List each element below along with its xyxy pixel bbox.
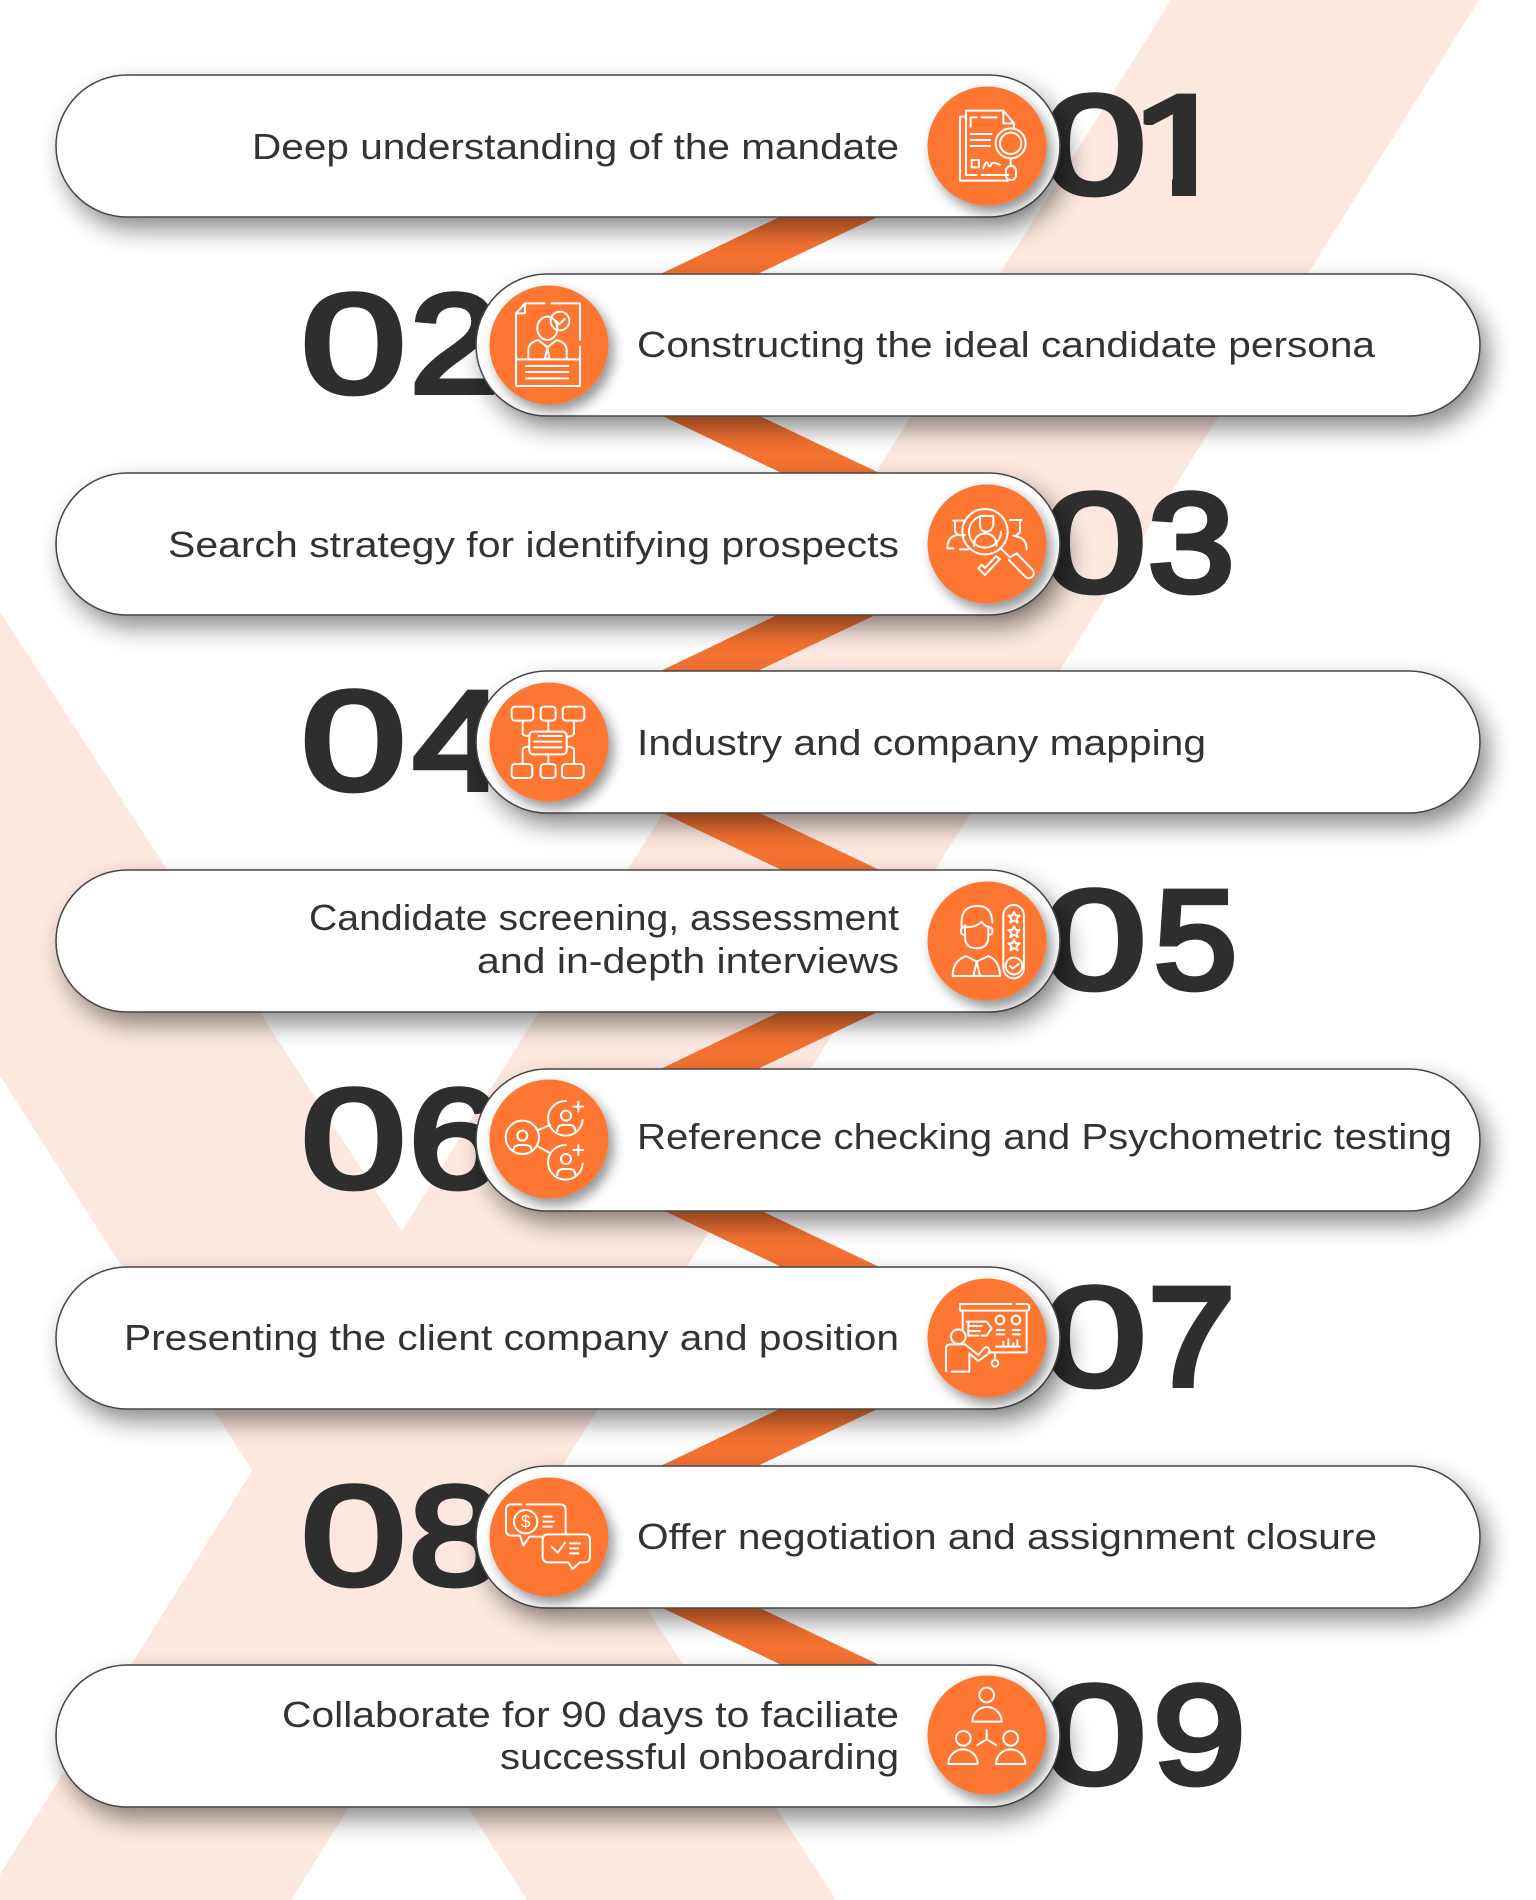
disc 03 [928, 484, 1046, 604]
number 01: 0 [1042, 67, 1146, 224]
step 05: and in-depth interviews [477, 940, 899, 981]
pill 06 [476, 1069, 1480, 1211]
pill 02 [476, 274, 1480, 416]
step 05 [56, 861, 1237, 1019]
number 03 [1042, 465, 1234, 622]
number 06: 6 [409, 1061, 502, 1217]
disc 02 [490, 286, 608, 404]
icon: company map [512, 707, 584, 778]
icon: presentation [946, 1304, 1029, 1372]
number 07: 7 [1148, 1259, 1235, 1415]
label 05: Candidate screening, assessment [309, 897, 899, 938]
number 05: 5 [1154, 861, 1237, 1018]
step 06 [302, 1061, 1480, 1218]
label 08: Offer negotiation and assignment closure [637, 1516, 1377, 1557]
number 09: 9 [1153, 1657, 1246, 1813]
icon: candidate rating [953, 905, 1024, 978]
step 09 [56, 1657, 1246, 1814]
number 03: 3 [1148, 465, 1234, 621]
number 03: 0 [1042, 465, 1146, 622]
label 01: Deep understanding of the mandate [252, 126, 899, 167]
pill 07 [56, 1267, 1060, 1409]
pill 03 [56, 473, 1060, 615]
disc 08 [490, 1478, 608, 1596]
number 08 [302, 1458, 502, 1615]
number 02 [302, 265, 499, 423]
pill 08 [476, 1466, 1480, 1608]
disc 04 [490, 682, 608, 802]
number 08: 8 [409, 1458, 502, 1614]
number 05 [1042, 861, 1237, 1019]
disc 01 [928, 86, 1046, 206]
icon: negotiation bubbles: $ [521, 1512, 531, 1532]
label 02: Constructing the ideal candidate persona [637, 324, 1376, 365]
disc 07 [928, 1278, 1046, 1398]
label 07: Presenting the client company and position [124, 1317, 899, 1358]
connectors between steps [648, 210, 892, 1671]
number 07 [1042, 1259, 1235, 1416]
number 09: 0 [1042, 1657, 1146, 1814]
number 05: 0 [1042, 862, 1146, 1019]
number 07: 0 [1042, 1259, 1146, 1416]
step 01 [56, 67, 1234, 224]
icon: negotiation bubbles [506, 1504, 590, 1569]
label 06: Reference checking and Psychometric testing [637, 1116, 1452, 1157]
step 04 [302, 663, 1480, 820]
pill 01 [56, 75, 1060, 217]
disc 05 [928, 882, 1046, 1000]
pill 09 [56, 1665, 1060, 1807]
label 09: Collaborate for 90 days to faciliate [282, 1694, 899, 1735]
number 04: 4 [413, 663, 506, 819]
label 04: Industry and company mapping [637, 722, 1206, 763]
disc 06 [490, 1080, 608, 1198]
number 01 [1052, 92, 1196, 198]
icon: referrals [506, 1101, 583, 1180]
step 09: successful onboarding [500, 1736, 899, 1777]
number 06: 0 [302, 1061, 406, 1218]
step 08 [302, 1458, 1480, 1615]
step 02 [302, 265, 1480, 423]
label 03: Search strategy for identifying prospects [168, 524, 899, 565]
icon: document with magnifier [960, 111, 1026, 181]
icon: magnifier over people [947, 509, 1034, 578]
step 03 [56, 465, 1234, 622]
number 01: 1 [1130, 67, 1234, 223]
number 04 [302, 663, 506, 820]
icon: candidate profile [516, 303, 580, 386]
number 06 [302, 1061, 502, 1218]
pill 05 [56, 870, 1060, 1012]
number 02: 0 [302, 266, 406, 423]
number 02: 2 [410, 265, 499, 422]
number 09 [1042, 1657, 1246, 1814]
number 08: 0 [302, 1458, 406, 1615]
icon: team collaboration [948, 1688, 1025, 1764]
pill 04 [476, 671, 1480, 813]
disc 09 [928, 1676, 1046, 1794]
step 07 [56, 1259, 1235, 1416]
number 04: 0 [302, 663, 406, 820]
